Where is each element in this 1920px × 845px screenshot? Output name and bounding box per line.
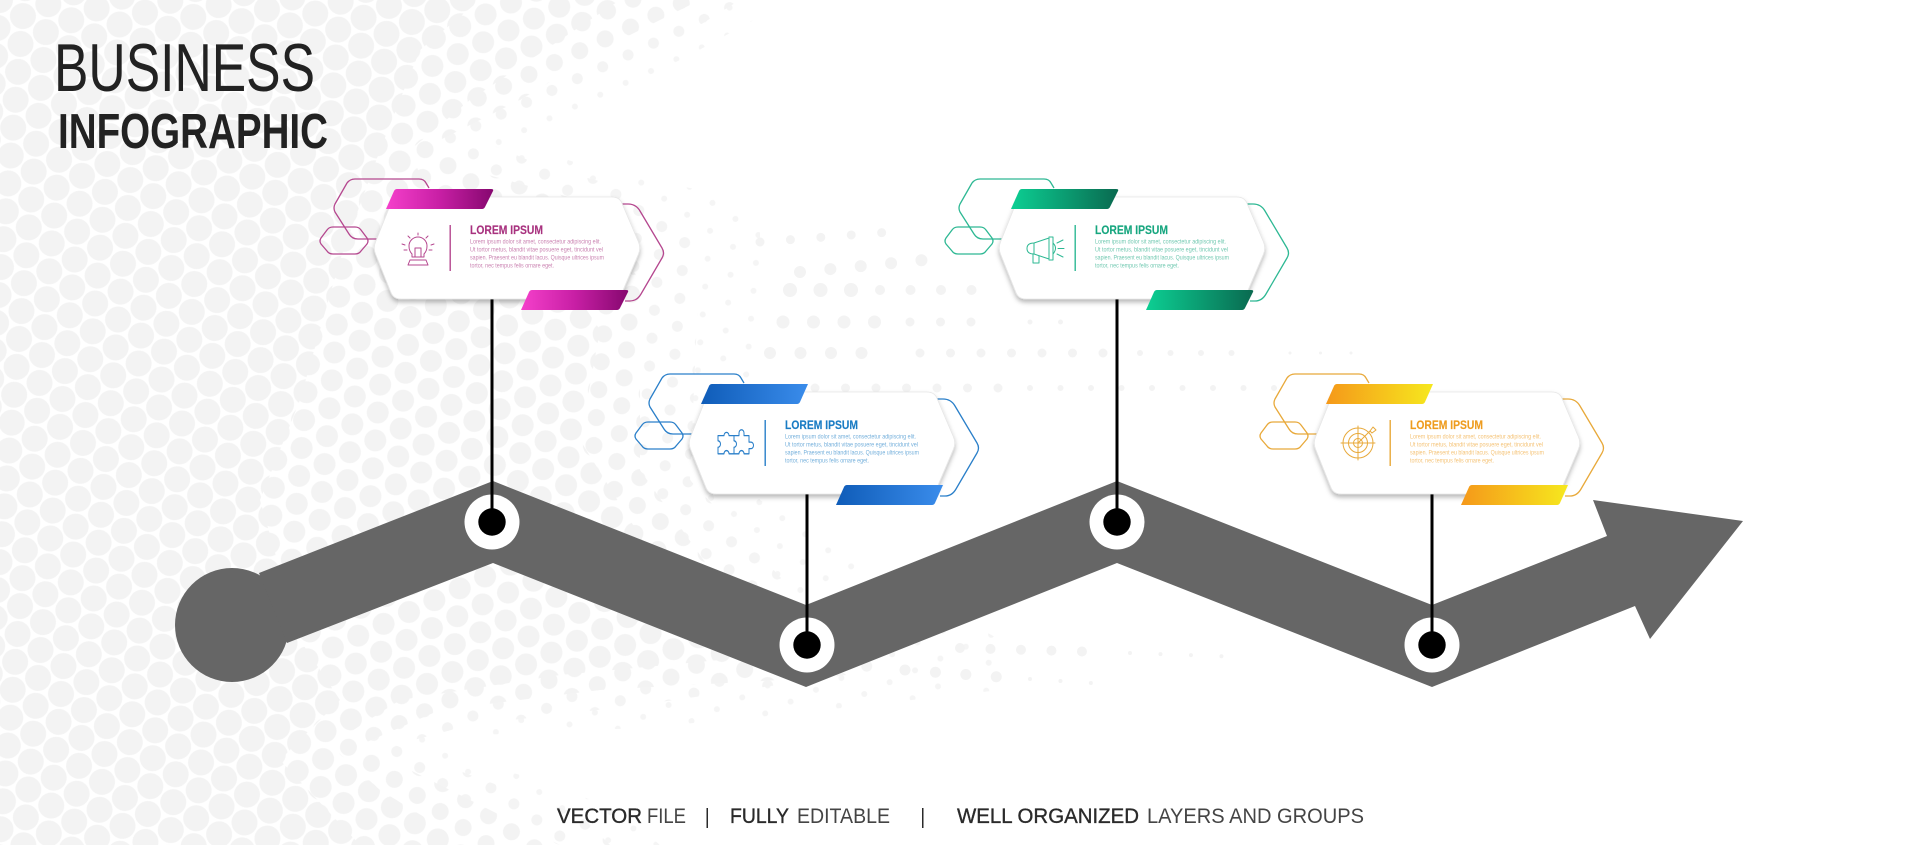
heading and text: tortor, nec tempus felis ornare eget.: [1410, 458, 1494, 464]
heading and text: tortor, nec tempus felis ornare eget.: [785, 458, 869, 464]
icon: puzzle: [718, 430, 754, 454]
heading and text: LOREM IPSUM: [1095, 225, 1168, 237]
heading and text: Lorem ipsum dolor sit amet, consectetur adipiscing elit.: [470, 238, 601, 246]
heading and text: LOREM IPSUM: [1410, 420, 1483, 432]
footer tagline: EDITABLE: [797, 805, 890, 828]
heading and text: [1095, 225, 1229, 270]
heading and text: Ut tortor metus, blandit vitae posuere eget, tincidunt vel: [1095, 246, 1228, 254]
heading and text: Lorem ipsum dolor sit amet, consectetur adipiscing elit.: [785, 434, 916, 440]
title: [54, 30, 328, 159]
icon: light bulb: [402, 233, 434, 265]
heading and text: sapien. Praesent eu blandit lacus. Quisque ultrices ipsum: [1410, 450, 1544, 456]
heading and text: LOREM IPSUM: [470, 225, 543, 237]
footer tagline: FILE: [647, 805, 686, 828]
heading and text: Ut tortor metus, blandit vitae posuere eget, tincidunt vel: [1410, 442, 1543, 448]
heading and text: LOREM IPSUM: [785, 420, 858, 432]
footer tagline: VECTOR: [557, 805, 642, 828]
node 2: [780, 493, 834, 672]
panel: card 3 green: [945, 179, 1288, 310]
node 3: [1090, 298, 1144, 550]
footer tagline: [557, 805, 1364, 828]
icon: target: [1341, 426, 1376, 460]
heading and text: Ut tortor metus, blandit vitae posuere eget, tincidunt vel: [785, 442, 918, 448]
footer tagline: FULLY: [730, 805, 789, 828]
heading and text: sapien. Praesent eu blandit lacus. Quisque ultrices ipsum: [470, 254, 604, 262]
heading and text: [785, 420, 919, 464]
footer tagline: LAYERS AND GROUPS: [1147, 805, 1364, 828]
heading and text: Lorem ipsum dolor sit amet, consectetur adipiscing elit.: [1095, 238, 1226, 246]
heading and text: Lorem ipsum dolor sit amet, consectetur adipiscing elit.: [1410, 434, 1541, 440]
heading and text: sapien. Praesent eu blandit lacus. Quisque ultrices ipsum: [785, 450, 919, 456]
node 1: [464, 298, 520, 550]
icon: megaphone: [1027, 237, 1064, 263]
heading and text: [1410, 420, 1544, 464]
heading and text: tortor, nec tempus felis ornare eget.: [470, 262, 554, 270]
heading and text: sapien. Praesent eu blandit lacus. Quisque ultrices ipsum: [1095, 254, 1229, 262]
node 4: [1404, 493, 1460, 672]
panel: card 2 blue: [635, 374, 978, 505]
panel: card 4 orange: [1260, 374, 1604, 505]
title: INFOGRAPHIC: [58, 105, 328, 159]
title: BUSINESS: [54, 30, 315, 106]
heading and text: [470, 225, 604, 270]
zigzag arrow timeline: [175, 481, 1743, 687]
panel: card 1 magenta: [320, 179, 664, 310]
heading and text: tortor, nec tempus felis ornare eget.: [1095, 262, 1179, 270]
heading and text: Ut tortor metus, blandit vitae posuere eget, tincidunt vel: [470, 246, 603, 254]
footer tagline: WELL ORGANIZED: [957, 805, 1139, 828]
